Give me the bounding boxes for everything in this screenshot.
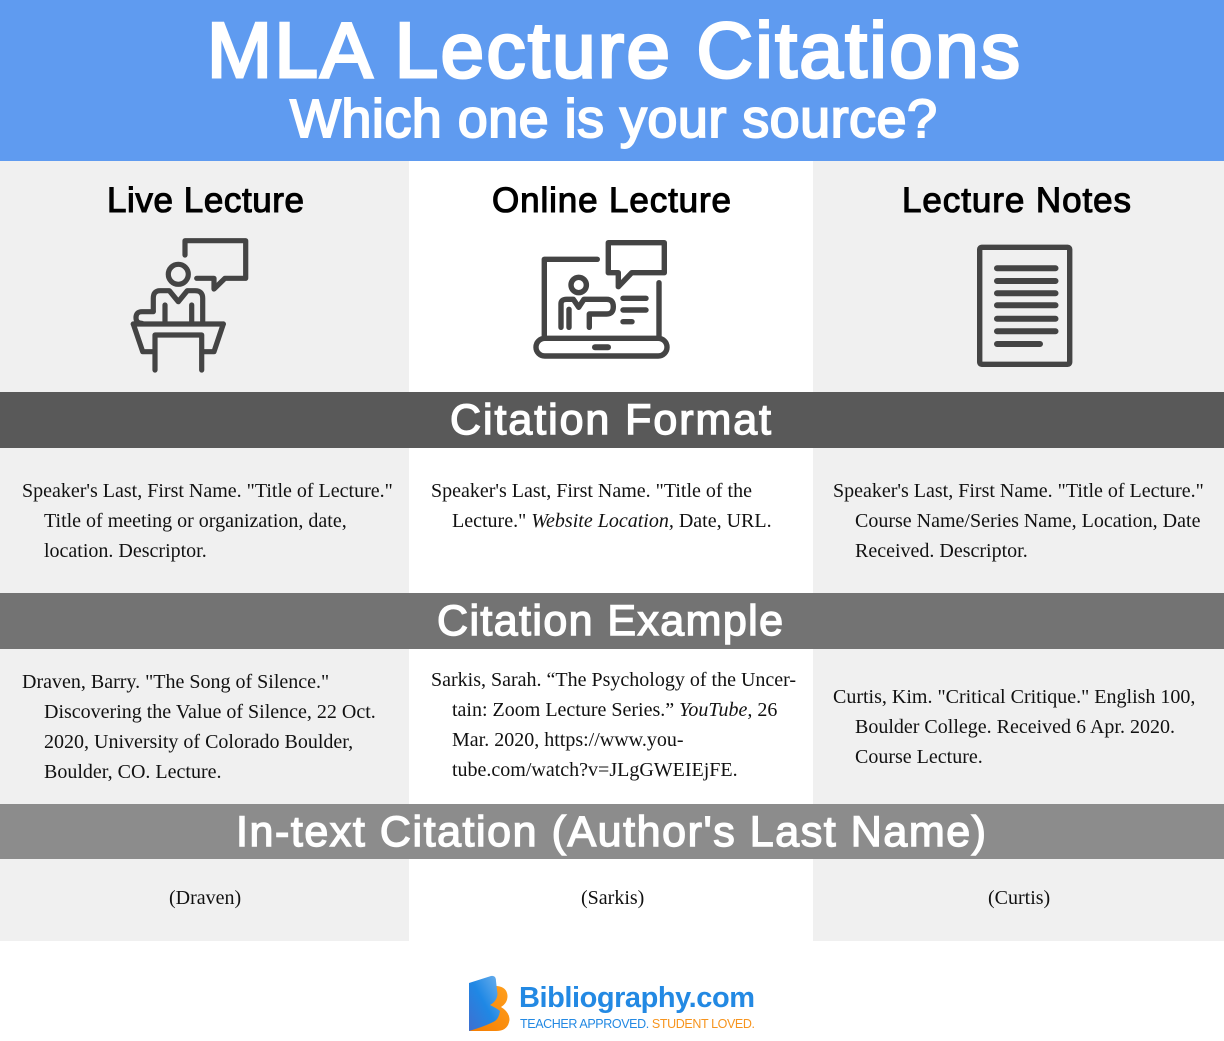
text: in-text Draven: (Draven) <box>169 887 241 909</box>
text: live lecture example: Discovering the Value of Silence, 22 Oct. <box>44 701 376 723</box>
text: live lecture example: Draven, Barry. "The Song of Silence." <box>22 671 329 693</box>
text: lecture notes format <box>833 480 1204 562</box>
icon: document with lines <box>980 247 1070 364</box>
text: live lecture format: location. Descriptor. <box>44 540 207 562</box>
panel: live lecture column <box>0 161 409 941</box>
header banner <box>0 0 1224 161</box>
logo: Bibliography.com: Bibliography.com <box>519 982 755 1014</box>
section bar: Citation Format: Citation Format <box>450 396 771 444</box>
text: lecture notes format: Received. Descriptor. <box>855 540 1028 562</box>
icon: online lecture laptop <box>536 243 667 356</box>
text: live lecture example: Boulder, CO. Lecture. <box>44 761 221 783</box>
text: online lecture example: Mar. 2020, https://www.you- <box>452 729 683 751</box>
section bar: Citation Example: Citation Example <box>437 597 783 645</box>
text: lecture notes format: Speaker's Last, First Name. "Title of Lecture." <box>833 480 1204 502</box>
panel: lecture notes column <box>813 161 1224 941</box>
text: lecture notes example <box>833 686 1195 768</box>
text: live lecture format: Title of meeting or organization, date, <box>44 510 347 532</box>
text: live lecture format <box>22 480 393 562</box>
text: in-text Sarkis: (Sarkis) <box>581 887 644 909</box>
text: online lecture example: tain: Zoom Lecture Series.” YouTube, 26 <box>452 699 777 721</box>
subtitle: Which one is your source? <box>290 89 937 149</box>
text: online lecture example <box>431 669 796 781</box>
text: online lecture example: Sarkis, Sarah. “The Psychology of the Uncer- <box>431 669 796 691</box>
text: live lecture example <box>22 671 376 783</box>
title: MLA Lecture Citations <box>207 6 1020 94</box>
text: online lecture format <box>431 480 772 532</box>
section bar: In-text Citation: In-text Citation (Author's Last Name) <box>236 808 986 856</box>
text: lecture notes example: Course Lecture. <box>855 746 983 768</box>
text: lecture notes format: Course Name/Series Name, Location, Date <box>855 510 1201 532</box>
section bar: In-text Citation <box>0 804 1224 859</box>
icon: speaker at podium <box>133 241 246 370</box>
text: in-text Curtis: (Curtis) <box>988 887 1050 909</box>
text: lecture notes example: Boulder College. Received 6 Apr. 2020. <box>855 716 1175 738</box>
heading: Online Lecture: Online Lecture <box>492 181 731 220</box>
logo: Bibliography.com: TEACHER APPROVED. STUDENT LOVED. <box>520 1017 755 1031</box>
heading: Lecture Notes: Lecture Notes <box>902 181 1131 220</box>
text: live lecture example: 2020, University of Colorado Boulder, <box>44 731 353 753</box>
text: online lecture example: tube.com/watch?v=JLgGWEIEjFE. <box>452 759 738 781</box>
text: lecture notes example: Curtis, Kim. "Critical Critique." English 100, <box>833 686 1195 708</box>
text: live lecture format: Speaker's Last, First Name. "Title of Lecture." <box>22 480 393 502</box>
icon: logo mark <box>469 976 510 1031</box>
section bar: Citation Format <box>0 392 1224 448</box>
logo: Bibliography.com <box>469 976 755 1031</box>
heading: Live Lecture: Live Lecture <box>107 181 304 220</box>
text: online lecture format: Speaker's Last, First Name. "Title of the <box>431 480 752 502</box>
section bar: Citation Example <box>0 593 1224 649</box>
text: online lecture format: Lecture." Website Location, Date, URL. <box>452 510 772 532</box>
